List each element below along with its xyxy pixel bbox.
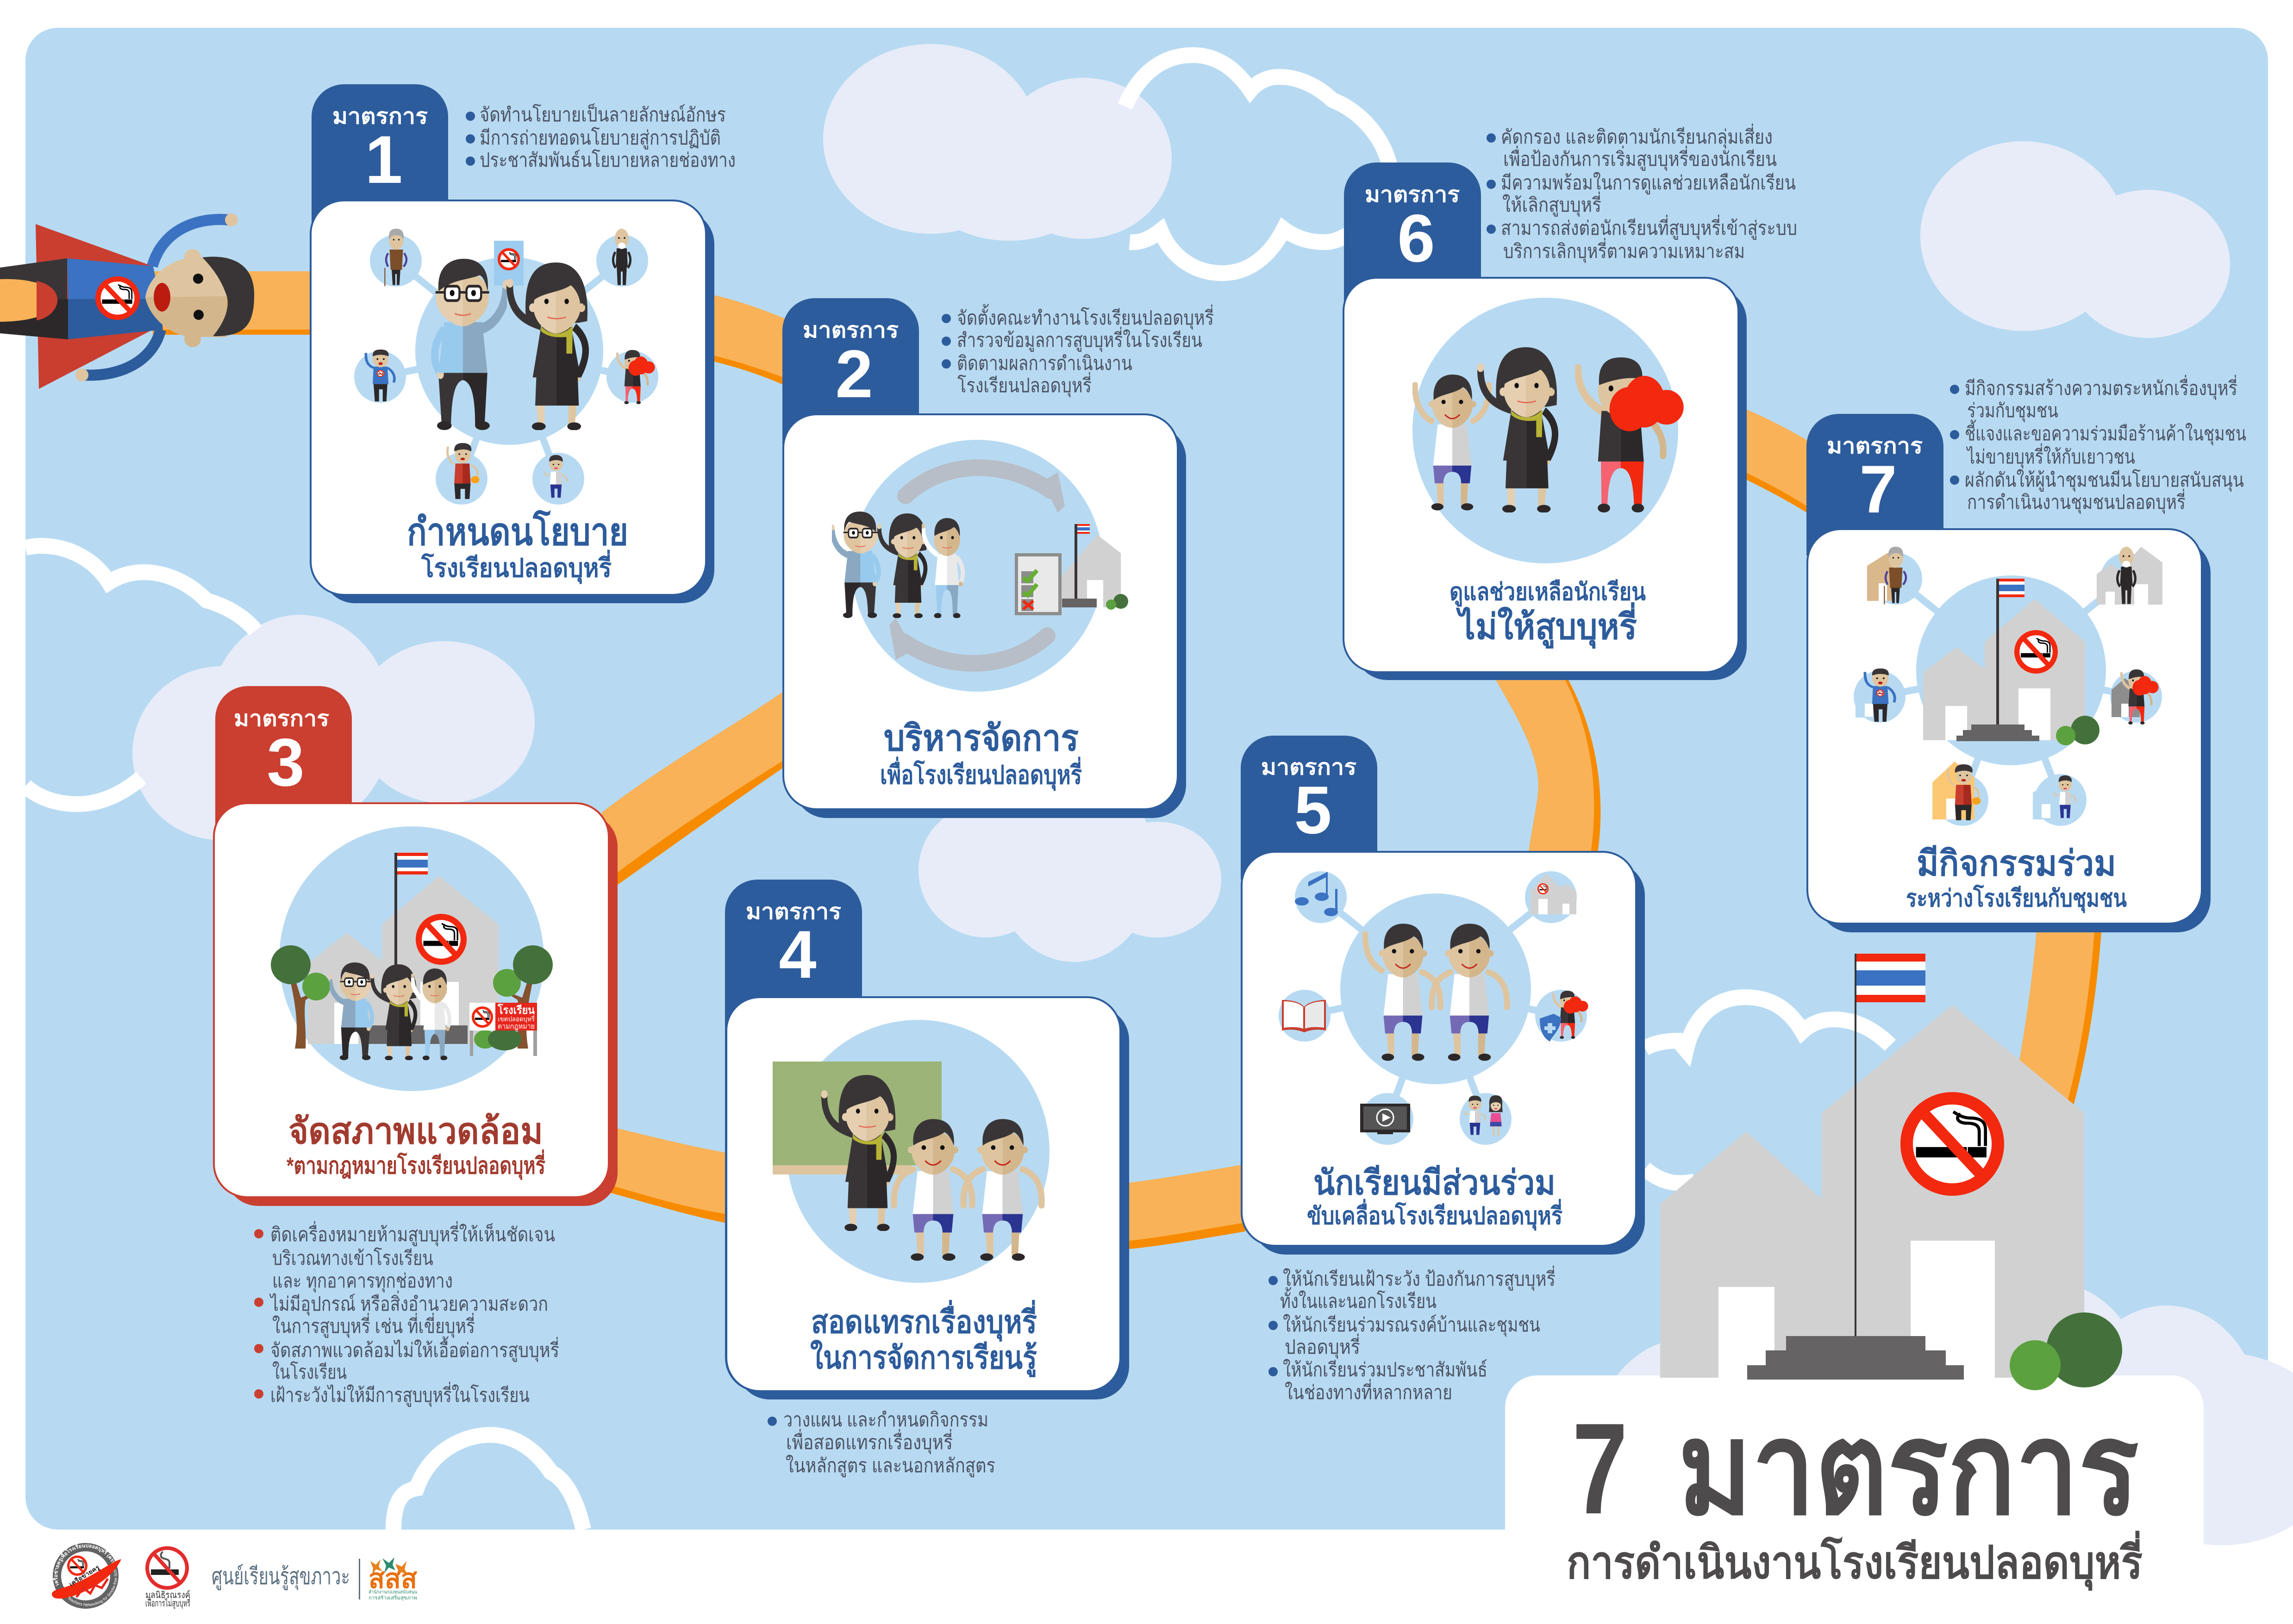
card heading: ดูแลช่วยเหลือนักเรียน [1450,579,1646,607]
bullet list: ทั้งในและนอกโรงเรียน [1280,1287,1437,1312]
card [782,413,1186,818]
illustration: management cycle [830,440,1128,692]
superhero character flying with no-smoking emblem [0,213,254,389]
card heading: จัดสภาพแวดล้อม [288,1111,543,1151]
logo: no smoking foundation: เพื่อการไม่สูบบุหรี่ [145,1597,190,1609]
tab: measure 7: 7 [1859,451,1897,527]
icon: television [1360,1104,1410,1134]
main title [1567,1397,2143,1591]
tab: measure 5: 5 [1294,772,1332,848]
card heading: สอดแทรกเรื่องบุหรี่ [811,1299,1037,1342]
tab: measure 7: มาตรการ [1827,433,1923,458]
card [1343,277,1747,680]
logo text: health literacy centre: ศูนย์เรียนรู้สุขภาวะ [212,1563,350,1590]
logo: ThaiHealth: การสร้างเสริมสุขภาพ [369,1595,417,1601]
bullet list [254,1221,559,1407]
tab: measure 3: 3 [267,725,305,800]
bullet list: ปลอดบุหรี่ [1285,1334,1360,1359]
illustration: policy group [354,229,658,505]
bullet list [1950,375,2246,514]
bullet list: ในหลักสูตร และนอกหลักสูตร [786,1455,995,1477]
bullet list: ผลักดันให้ผู้นำชุมชนมีนโยบายสนับสนุน [1965,468,2244,492]
icon: open book [1282,1000,1326,1032]
panel: measure 4 [725,880,1129,1477]
card heading: ขับเคลื่อนโรงเรียนปลอดบุหรี่ [1307,1199,1562,1231]
logo: teachers network: เครือข่ายครูเพื่อโรงเรียนปลอดบุหรี่ (ครบ.) [0,0,117,1587]
card heading: *ตามกฎหมายโรงเรียนปลอดบุหรี่ [287,1149,545,1180]
bullet list: ประชาสัมพันธ์นโยบายหลายช่องทาง [480,149,736,171]
illustration: teacher and students at board [773,1020,1050,1283]
panel: measure 2 [782,298,1214,818]
bullet list: บริการเลิกบุหรี่ตามความเหมาะสม [1503,238,1745,263]
icon: music notes [1295,872,1338,916]
bullet list [1268,1266,1556,1403]
footer logos [0,0,418,1609]
card [1241,851,1645,1255]
card [1806,528,2211,932]
tab: measure 6 [1344,162,1481,306]
tab: measure 3 [215,686,352,833]
bullet list: ให้นักเรียนเฝ้าระวัง ป้องกันการสูบบุหรี่ [1283,1266,1556,1291]
school sign board [469,1003,537,1031]
card heading [407,510,628,584]
illustration: student participation [1279,871,1588,1145]
bullet list [942,304,1214,398]
card heading: ในการจัดการเรียนรู้ [810,1339,1037,1378]
icon: Thai flag [1856,954,1925,1002]
bullet list: ติดตามผลการดำเนินงาน [957,352,1132,374]
bullet list: จัดตั้งคณะทำงานโรงเรียนปลอดบุหรี่ [957,304,1214,330]
bullet list: ติดเครื่องหมายห้ามสูบบุหรี่ให้เห็นชัดเจน [270,1221,555,1247]
logo: ThaiHealth [369,1557,418,1601]
card heading: มีกิจกรรมร่วม [1917,844,2116,883]
bullet list: วางแผน และกำหนดกิจกรรม [783,1409,988,1430]
panel: measure 5 [1241,736,1645,1403]
tab: measure 1: มาตรการ [332,104,428,128]
tab: measure 1 [312,84,448,231]
card heading [880,718,1082,791]
bullet list: บริเวณทางเข้าโรงเรียน [272,1247,433,1269]
tab: measure 5 [1241,736,1377,880]
tab: measure 3: มาตรการ [234,706,329,731]
icon: no smoking sign [1906,1098,1998,1190]
bullet list: ในโรงเรียน [272,1361,347,1383]
illustration: smoke-free school environment [271,826,553,1091]
panel: measure 7 [1806,375,2246,932]
logo: no smoking foundation [145,1548,190,1609]
bullet list: เฝ้าระวังไม่ให้มีการสูบบุหรี่ในโรงเรียน [270,1382,530,1407]
bullet list: ให้นักเรียนร่วมรณรงค์บ้านและชุมชน [1283,1314,1540,1337]
bullet list: จัดทำนโยบายเป็นลายลักษณ์อักษร [480,103,726,125]
main title: 7 [1572,1397,1628,1541]
tab: measure 7 [1806,414,1943,556]
bullet list: ให้เลิกสูบบุหรี่ [1502,192,1601,217]
school sign board: เขตปลอดบุหรี่ [498,1015,535,1023]
panel: measure 1 [310,84,736,603]
icon: school house [1531,874,1576,914]
tab: measure 1: 1 [365,122,403,197]
bullet list: ร่วมกับชุมชน [1967,400,2058,423]
illustration: teacher with student and smoker [1412,298,1684,563]
bullet list: จัดสภาพแวดล้อมไม่ให้เอื้อต่อการสูบบุหรี่ [270,1336,559,1362]
bullet list: เพื่อป้องกันการเริ่มสูบบุหรี่ของนักเรียน [1503,146,1777,171]
illustration: school and community [1854,547,2162,826]
logo: teachers network: เครือข่ายครู [68,1564,101,1588]
card heading: บริหารจัดการ [884,718,1079,758]
bullet list: และ ทุกอาคารทุกช่องทาง [272,1270,453,1293]
school sign board: โรงเรียน [497,1003,535,1017]
bullet list: ไม่มีอุปกรณ์ หรือสิ่งอำนวยความสะดวก [269,1291,548,1316]
tab: measure 4 [725,880,862,1028]
tab: measure 2 [782,298,919,444]
card heading [1450,579,1646,649]
main title: มาตรการ [1678,1397,2139,1541]
bullet list: ไม่ขายบุหรี่ให้กับเยาวชน [1966,443,2135,469]
logo: ThaiHealth: สำนักงานกองทุนสนับสนุน [369,1590,417,1595]
tab: measure 6: 6 [1397,200,1435,276]
tab: measure 6: มาตรการ [1365,182,1460,206]
bullet list [768,1409,995,1477]
card heading: นักเรียนมีส่วนร่วม [1313,1163,1556,1202]
tab: measure 2: 2 [835,336,873,412]
logo: no smoking foundation: มูลนิธิรณรงค์ [145,1590,190,1601]
logo: teachers network: Teachers Networking for Smoke-free Schools. [0,0,118,1607]
card heading [1906,844,2127,913]
school building with flag [1660,954,2122,1390]
bullet list: สามารถส่งต่อนักเรียนที่สูบบุหรี่เข้าสู่ระบบ [1501,215,1797,240]
bullet list: การดำเนินงานชุมชนปลอดบุหรี่ [1967,489,2186,514]
ribbon path connecting the measures [153,271,2102,1249]
card [725,996,1129,1399]
bullet list: มีการถ่ายทอดนโยบายสู่การปฏิบัติ [480,126,721,150]
bullet list: ให้นักเรียนร่วมประชาสัมพันธ์ [1283,1359,1487,1380]
school sign board: ตามกฎหมาย [498,1023,535,1031]
card [213,802,618,1206]
card heading: กำหนดนโยบาย [407,510,628,553]
bullet list: มีกิจกรรมสร้างความตระหนักเรื่องบุหรี่ [1965,375,2237,400]
card heading: ระหว่างโรงเรียนกับชุมชน [1906,884,2127,913]
card heading: ไม่ให้สูบบุหรี่ [1456,602,1637,649]
panel: measure 3 [213,686,618,1407]
bullet list: ในช่องทางที่หลากหลาย [1285,1379,1452,1403]
panel: measure 6 [1343,124,1797,680]
main title: การดำเนินงานโรงเรียนปลอดบุหรี่ [1567,1530,2143,1591]
bullet list [1487,124,1797,263]
card heading [810,1299,1037,1378]
bullet list: ในการสูบบุหรี่ เช่น ที่เขี่ยบุหรี่ [272,1313,475,1338]
bullet list: เพื่อสอดแทรกเรื่องบุหรี่ [786,1429,953,1455]
tab: measure 4: มาตรการ [746,899,841,924]
card heading: เพื่อโรงเรียนปลอดบุหรี่ [880,756,1082,791]
bullet list: โรงเรียนปลอดบุหรี่ [957,372,1092,398]
card [310,200,714,603]
tab: measure 5: มาตรการ [1261,755,1356,779]
card heading [1307,1163,1562,1231]
card heading: โรงเรียนปลอดบุหรี่ [421,550,612,584]
bullet list: มีความพร้อมในการดูแลช่วยเหลือนักเรียน [1501,172,1796,194]
tab: measure 2: มาตรการ [803,318,899,342]
bullet list: คัดกรอง และติดตามนักเรียนกลุ่มเสี่ยง [1501,124,1773,149]
title panel backing [1505,1375,2204,1624]
bullet list: สำรวจข้อมูลการสูบบุหรี่ในโรงเรียน [957,327,1202,352]
bullet list [466,103,736,171]
logo: ThaiHealth: สสส [369,1564,418,1594]
icon: shield with smoker [1540,991,1588,1042]
tab: measure 4: 4 [779,917,817,992]
card heading [287,1111,545,1180]
